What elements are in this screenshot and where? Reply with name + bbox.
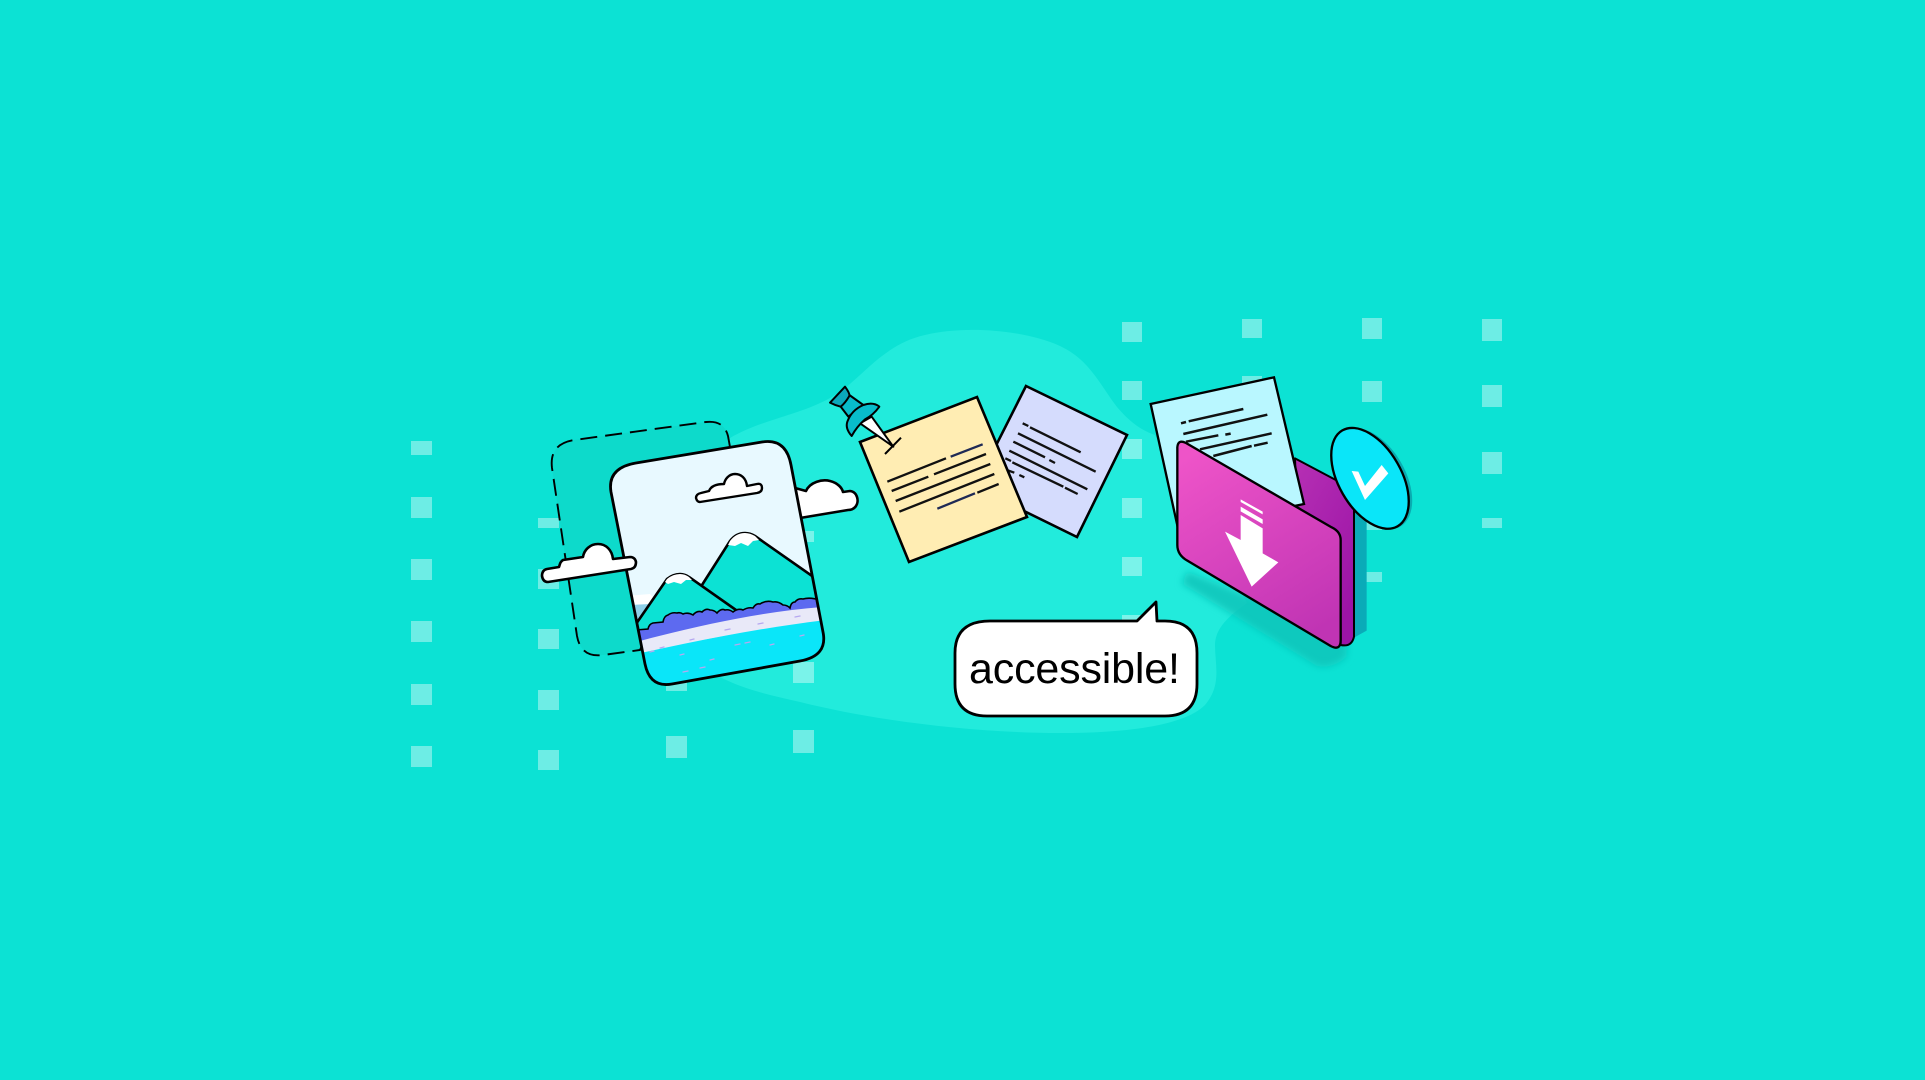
pin base (847, 404, 879, 436)
note sheet (975, 386, 1127, 537)
pin hole (885, 438, 901, 454)
bubble shape (955, 602, 1197, 716)
water (644, 620, 822, 684)
left cloud (542, 544, 636, 582)
card sky (611, 441, 824, 685)
arrow stripes (1241, 499, 1263, 524)
speech bubble (955, 602, 1197, 716)
folder ground shadow (1182, 572, 1347, 667)
folder back panel (1295, 458, 1354, 645)
ripple marks (650, 616, 804, 672)
badge check mark (1352, 465, 1388, 500)
front mountain (638, 572, 737, 629)
back mountain (701, 532, 815, 610)
badge disc (1315, 415, 1425, 542)
note sheet (860, 397, 1027, 562)
folder side shadow (1353, 507, 1367, 638)
bushes (640, 597, 817, 640)
paper in folder (1151, 377, 1304, 530)
small cloud in card (696, 474, 762, 502)
cloud behind card (795, 480, 858, 518)
beach (642, 608, 820, 652)
back mountain snow (728, 533, 759, 546)
pin stem (841, 395, 863, 417)
folder group (1151, 377, 1367, 667)
decorative square grid (411, 318, 1502, 770)
paper text lines (1181, 409, 1272, 456)
arrow body (1225, 515, 1278, 587)
pin needle (860, 417, 893, 447)
yellow note (860, 397, 1027, 562)
note text lines (887, 444, 999, 512)
card scenery (633, 532, 822, 684)
folder front panel (1177, 442, 1341, 648)
pin head cap (830, 387, 849, 407)
check badge (1315, 414, 1429, 543)
image card (611, 441, 830, 695)
paper sheet (1151, 377, 1304, 530)
purple note (975, 386, 1127, 537)
bubble text: accessible! (969, 645, 1180, 693)
note text lines (1005, 423, 1096, 494)
illustration canvas (411, 318, 1502, 770)
haze (633, 594, 653, 605)
card outline (611, 441, 824, 685)
badge shadow (1317, 414, 1429, 543)
front mountain snow (665, 574, 692, 584)
dashed placeholder card (552, 422, 730, 655)
download arrow (1225, 499, 1278, 587)
push pin (830, 387, 901, 454)
background blob (640, 330, 1247, 733)
